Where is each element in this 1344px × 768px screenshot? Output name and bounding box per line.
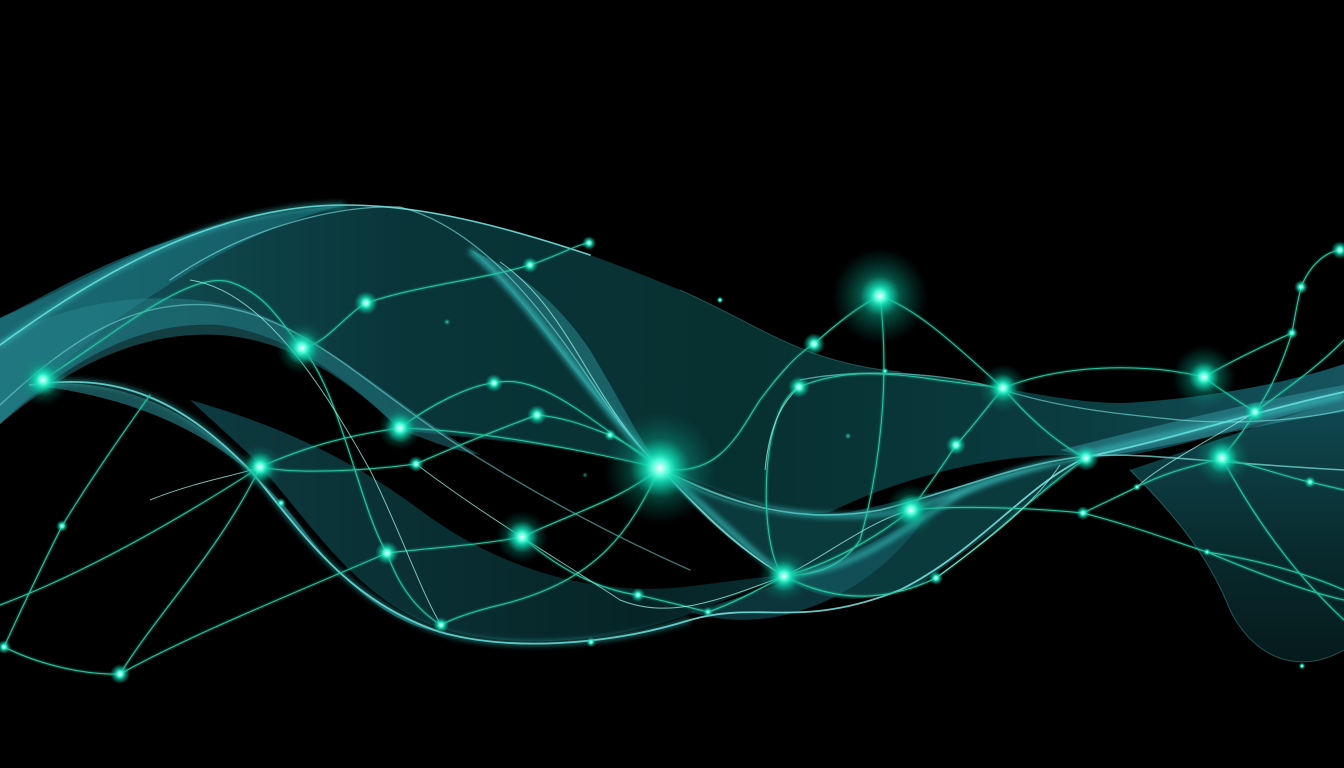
large node halos [17,248,1250,602]
ribbons: translucent teal sheets [0,205,1344,662]
ribbon edge highlights [0,205,1344,662]
pale thin strands [150,262,1255,625]
blurred bright bundle through the centre [0,205,1344,644]
glowing nodes [0,236,1344,684]
connecting network lines [0,243,1344,674]
